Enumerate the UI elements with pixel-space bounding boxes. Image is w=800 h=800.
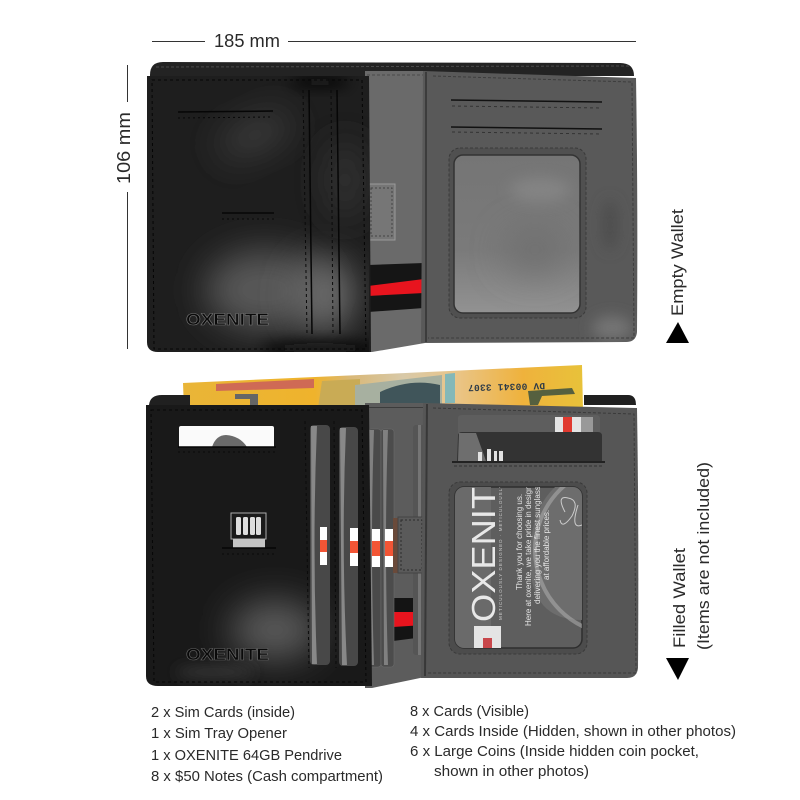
up arrow bbox=[666, 322, 689, 343]
contents list: right column: 6 x Large Coins (Inside hidden coin pocket, bbox=[410, 743, 699, 760]
filled wallet photo bbox=[146, 365, 638, 688]
down arrow bbox=[666, 658, 689, 680]
cards in left panel slots bbox=[310, 425, 358, 666]
dimension: width 185 mm: 185 mm bbox=[214, 31, 280, 51]
contents list: right column: 8 x Cards (Visible) bbox=[410, 703, 529, 720]
center gusset with elastic band and tab bbox=[365, 71, 425, 352]
left outer panel bbox=[147, 76, 380, 354]
contents list: left column: 8 x $50 Notes (Cash compartment) bbox=[151, 768, 383, 785]
contents list: right column: shown in other photos) bbox=[434, 763, 589, 780]
ID window with card: Here at oxenite, we take pride in designing bbox=[524, 475, 533, 626]
filled wallet label: Filled Wallet bbox=[670, 548, 689, 648]
contents list: right column: 4 x Cards Inside (Hidden, shown in other photos) bbox=[410, 723, 736, 740]
embossed logo: OXENITE bbox=[186, 310, 269, 329]
lower slot card bbox=[457, 432, 602, 461]
photo ID card bbox=[179, 426, 274, 447]
upper slot card bbox=[458, 415, 600, 434]
left outer panel with pockets bbox=[146, 405, 372, 686]
empty wallet label: Empty Wallet bbox=[668, 209, 687, 316]
right inner panel bbox=[421, 71, 637, 343]
card stripes bbox=[372, 529, 380, 567]
contents list: right column bbox=[410, 703, 736, 780]
ID window with card: METICULOUSLY DESIGNED · METICULOUSLY bbox=[498, 485, 503, 620]
banknote bbox=[183, 365, 583, 410]
banknote: DV 00341 3307 bbox=[468, 380, 545, 393]
empty wallet photo bbox=[147, 62, 637, 354]
empty wallet label bbox=[666, 209, 689, 343]
cards in center bbox=[368, 429, 381, 667]
right inner panel with cards bbox=[421, 403, 638, 678]
filled wallet label: (Items are not included) bbox=[694, 462, 713, 650]
dimension: height 106 mm: 106 mm bbox=[114, 112, 134, 184]
center gusset with cards bbox=[365, 403, 427, 688]
back layer of wallet bbox=[150, 62, 634, 76]
ID window with card: OXENIT bbox=[465, 487, 502, 622]
contents list: left column bbox=[151, 704, 383, 785]
icon: USB pendrive bbox=[231, 513, 266, 548]
ID window with card bbox=[454, 486, 583, 649]
brown tab bbox=[393, 518, 399, 573]
ID window with card: at affordable prices. bbox=[542, 510, 551, 580]
ID window with card: Thank you for choosing us. bbox=[515, 494, 524, 590]
contents list: left column: 1 x OXENITE 64GB Pendrive bbox=[151, 747, 342, 764]
filled wallet label bbox=[666, 462, 713, 680]
ID window with card: delivering you the finest sunglasses bbox=[533, 478, 542, 604]
contents list: left column: 1 x Sim Tray Opener bbox=[151, 725, 287, 742]
contents list: left column: 2 x Sim Cards (inside) bbox=[151, 704, 295, 721]
tall card bbox=[413, 425, 427, 655]
back layer of filled wallet bbox=[149, 395, 636, 405]
embossed logo: OXENITE bbox=[186, 645, 269, 664]
ID window bbox=[454, 155, 580, 313]
